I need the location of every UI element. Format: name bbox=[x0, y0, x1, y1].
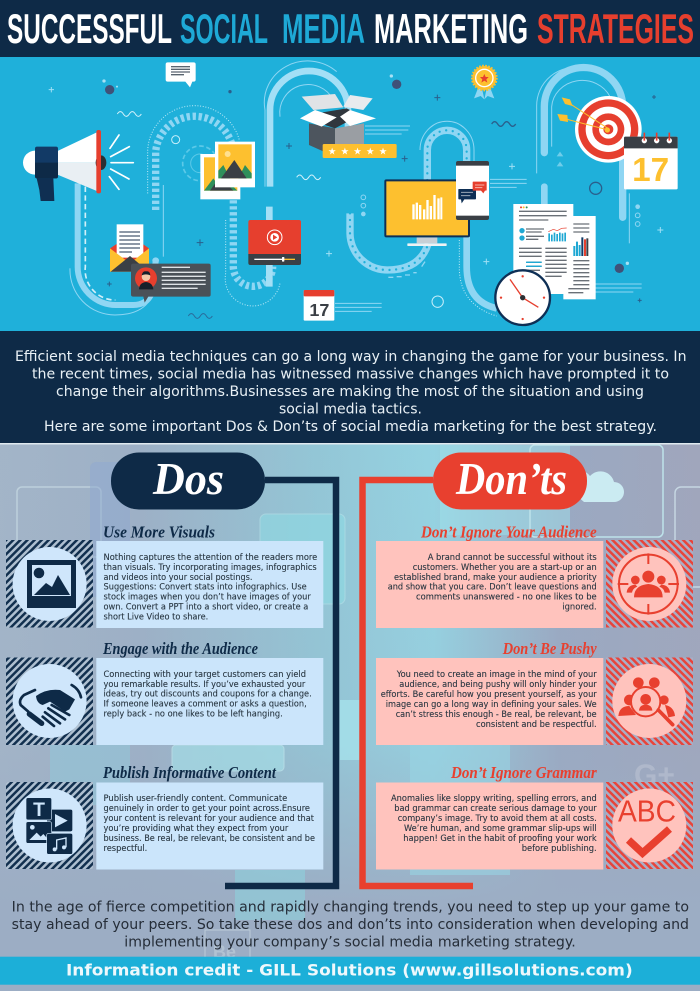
icon: award medal bbox=[472, 66, 496, 99]
icon: small calendar bbox=[304, 290, 334, 321]
icon: envelope bbox=[110, 224, 149, 272]
icon: large calendar: 17 bbox=[632, 152, 669, 189]
text box: ignored. bbox=[562, 603, 597, 613]
closing paragraph: In the age of fierce competition and rapidly changing trends, you need to step up your game to bbox=[12, 900, 689, 916]
footer credit bar bbox=[0, 957, 700, 985]
icon: ABC check: ABC bbox=[618, 794, 676, 828]
icon: chat profile card bbox=[131, 264, 211, 303]
text box: bad grammar can create serious damage to your bbox=[394, 804, 597, 814]
heading: Use More Visuals bbox=[103, 522, 215, 542]
heading pill: Dos: Dos bbox=[152, 453, 224, 504]
title text: SOCIAL bbox=[180, 5, 268, 52]
text box: than visuals. Try incorporating images, infographics bbox=[104, 563, 317, 573]
intro panel bbox=[0, 331, 700, 444]
text box: customers. Whether you are a start-up or an bbox=[413, 563, 597, 573]
text box: you remarkable results. If you’ve exhausted your bbox=[104, 680, 306, 690]
text box: image can go a long way in defining your sales. We bbox=[386, 700, 597, 710]
closing paragraph: stay ahead of your peers. So take these dos and don’ts into consideration when developing and bbox=[12, 917, 689, 933]
heading: Engage with the Audience bbox=[102, 639, 258, 658]
text box: stock images when you don’t have images of your bbox=[104, 593, 311, 603]
intro text: Here are some important Dos & Don’ts of social media marketing for the best strategy. bbox=[44, 419, 657, 435]
icon: handshake bbox=[6, 658, 93, 745]
text box: Nothing captures the attention of the readers more bbox=[104, 553, 317, 563]
footer credit bar: Information credit - GILL Solutions (www.gillsolutions.com) bbox=[66, 960, 633, 980]
title text: MEDIA bbox=[282, 5, 365, 52]
text box: and show that you care. Don’t leave questions and bbox=[388, 583, 597, 593]
panel: don't ignore grammar bbox=[376, 763, 693, 870]
text box: consistent and be respectful. bbox=[476, 720, 597, 730]
text box: company’s image. Try to avoid them at all costs. bbox=[398, 814, 597, 824]
heading pill: Dos bbox=[111, 452, 265, 510]
text box: efforts. Be careful how you present yourself, as your bbox=[381, 690, 597, 700]
text box: comments unanswered - no one likes to be bbox=[416, 593, 597, 603]
icon: smartphone with chat bbox=[456, 161, 489, 220]
text box: your content is relevant for your audience and that bbox=[104, 814, 314, 824]
closing paragraph: implementing your company’s social media marketing strategy. bbox=[124, 935, 576, 951]
intro text bbox=[15, 349, 687, 435]
title text: SUCCESSFUL bbox=[7, 5, 172, 52]
intro text: change their algorithms.Businesses are making the most of the situation and using bbox=[56, 384, 644, 400]
text box: Suggestions: Convert stats into infographics. Use bbox=[104, 583, 307, 593]
text box: Connecting with your target customers can yield bbox=[104, 670, 306, 680]
icon: report documents bbox=[513, 204, 596, 299]
icon: target audience bbox=[606, 540, 693, 628]
text box bbox=[376, 658, 603, 745]
text box: audience, and being pushy will only hinder your bbox=[399, 680, 597, 690]
text box: We’re human, and some grammar slip-ups will bbox=[404, 824, 597, 834]
decorative tracks right bbox=[350, 67, 663, 316]
icon: target with arrows bbox=[557, 96, 642, 163]
icon: clock bbox=[495, 270, 550, 325]
panel: don't be pushy bbox=[376, 639, 693, 745]
icon: video player bbox=[248, 220, 301, 265]
icon: photos bbox=[200, 142, 255, 199]
heading: Don’t Ignore Your Audience bbox=[420, 522, 597, 542]
heading: Publish Informative Content bbox=[102, 763, 276, 782]
heading: Don’t Be Pushy bbox=[502, 639, 597, 658]
panel: publish informative content bbox=[6, 763, 323, 870]
text box: ideas, try out discounts and coupons for a change. bbox=[104, 690, 312, 700]
title bar bbox=[0, 0, 700, 57]
icon: monitor with bar chart bbox=[385, 180, 469, 246]
intro text: social media tactics. bbox=[279, 402, 422, 418]
icon: search people bbox=[606, 658, 693, 745]
bracket line: don'ts bbox=[362, 480, 473, 886]
text box: happen! Get in the habit of proofing your work bbox=[403, 834, 597, 844]
text box: genuinely in order to get your point across.Ensure bbox=[104, 804, 310, 814]
panel: don't ignore your audience bbox=[376, 522, 693, 628]
page background: G+ bbox=[634, 759, 675, 792]
title text bbox=[7, 5, 694, 52]
text box: reply back - no one likes to be left hanging. bbox=[104, 710, 283, 720]
page background: Be bbox=[213, 942, 236, 962]
text box bbox=[376, 541, 603, 628]
text box bbox=[376, 782, 603, 870]
text box: you’re providing what they expect from your bbox=[104, 824, 289, 834]
hero illustration panel bbox=[0, 57, 700, 331]
intro text: the recent times, social media has witnessed massive changes which have prompted it to bbox=[32, 366, 669, 382]
intro text: Efficient social media techniques can go a long way in changing the game for your business. In bbox=[15, 349, 687, 365]
icon: ABC check bbox=[606, 782, 693, 869]
text box: respectful. bbox=[104, 844, 147, 854]
icon: product box with rating: ★★★★★ bbox=[328, 147, 391, 157]
text box: own. Convert a PPT into a short video, or create a bbox=[104, 603, 308, 613]
heading: Don’t Ignore Grammar bbox=[450, 763, 597, 782]
text box: established brand, make your audience a priority bbox=[394, 573, 597, 583]
closing paragraph bbox=[12, 900, 689, 951]
panel: use more visuals bbox=[6, 522, 323, 628]
text box bbox=[96, 782, 323, 870]
icon: large calendar bbox=[624, 133, 678, 189]
heading pill: Don'ts: Don’ts bbox=[455, 453, 567, 504]
panel: engage with the audience bbox=[6, 639, 323, 745]
text box: You need to create an image in the mind of your bbox=[396, 670, 597, 680]
icon: media content bbox=[6, 782, 93, 869]
text box: business. Be real, be relevant, be consistent and be bbox=[104, 834, 315, 844]
bracket line: dos bbox=[225, 480, 336, 886]
text box bbox=[96, 541, 323, 628]
page background bbox=[0, 444, 700, 991]
icon: megaphone bbox=[23, 130, 133, 201]
icon: media content: T bbox=[33, 800, 45, 821]
icon: speech bubble bbox=[166, 62, 196, 87]
text box bbox=[96, 658, 323, 745]
text box: Anomalies like sloppy writing, spelling errors, and bbox=[391, 794, 597, 804]
text box: Publish user-friendly content. Communicate bbox=[104, 794, 287, 804]
title text: MARKETING bbox=[374, 5, 528, 52]
text box: A brand cannot be successful without its bbox=[428, 553, 597, 563]
text box: can’t stress this enough - Be real, be relevant, be bbox=[396, 710, 597, 720]
text box: and videos into your social postings. bbox=[104, 573, 252, 583]
text box: short Live Video to share. bbox=[104, 613, 208, 623]
decorative tracks bbox=[49, 61, 350, 318]
icon: small calendar: 17 bbox=[309, 300, 329, 320]
text box: If someone leaves a comment or asks a question, bbox=[104, 700, 307, 710]
icon: picture bbox=[6, 540, 93, 628]
text box: before publishing. bbox=[522, 844, 597, 854]
